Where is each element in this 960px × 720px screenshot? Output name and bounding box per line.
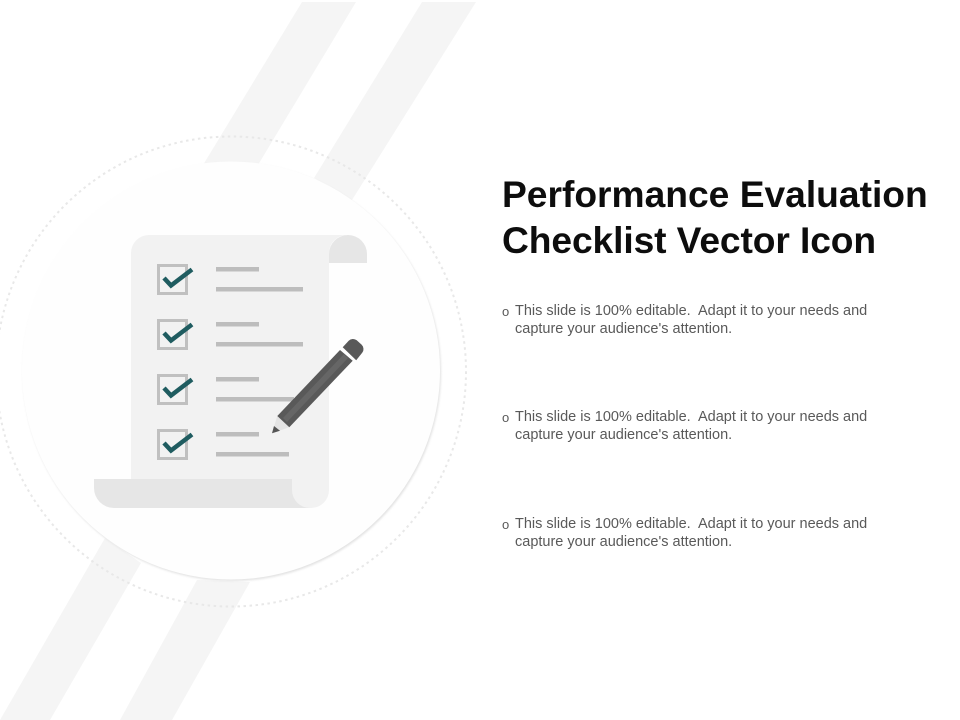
bottom curl bbox=[94, 479, 310, 508]
checklist row 1 bbox=[158, 266, 303, 294]
bullet text 2: This slide is 100% editable. Adapt it to your needs and capture your audience's attention. bbox=[515, 409, 867, 443]
title: Checklist Vector Icon bbox=[502, 219, 876, 261]
bullet text 1: This slide is 100% editable. Adapt it to your needs and capture your audience's attention. bbox=[515, 303, 867, 337]
bullet text 2: o bbox=[502, 410, 509, 425]
checklist row 3 bbox=[158, 376, 294, 404]
icon: scroll paper bbox=[94, 235, 367, 508]
dotted outer ring bbox=[0, 136, 466, 606]
icon: pencil bbox=[272, 339, 363, 433]
title bbox=[502, 173, 928, 261]
checklist row 4 bbox=[158, 430, 289, 458]
top curl bbox=[329, 235, 367, 263]
bullet text 3: This slide is 100% editable. Adapt it to your needs and capture your audience's attention. bbox=[515, 516, 867, 550]
diagonal background stripes bbox=[0, 2, 476, 720]
bullet text 1: o bbox=[502, 304, 509, 319]
title: Performance Evaluation bbox=[502, 173, 928, 215]
bullet text 3: o bbox=[502, 517, 509, 532]
checklist row 2 bbox=[158, 320, 303, 348]
central white circle bbox=[22, 162, 441, 581]
